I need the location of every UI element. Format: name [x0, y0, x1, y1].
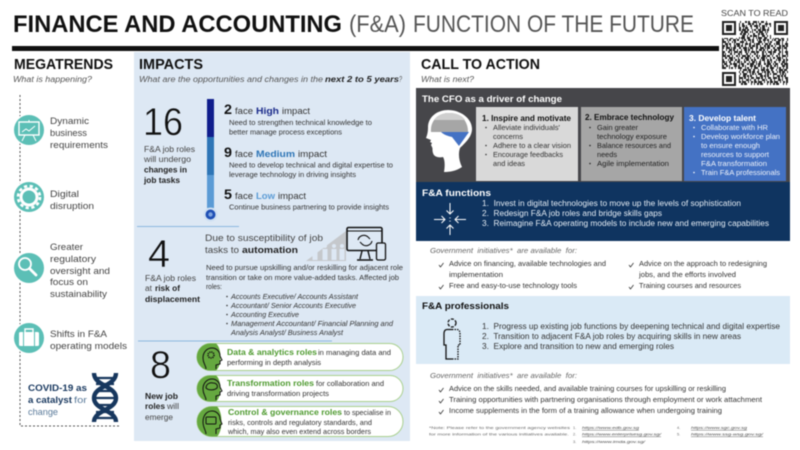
stat: 16 roles: job tasks: [143, 176, 181, 185]
government initiatives for professionals: Income supplements in the form of a training allowance when undergoing training: [449, 406, 722, 415]
panel: F&A functions: [416, 182, 790, 241]
card: develop talent: resources to support: [701, 150, 769, 159]
trend: operating models: Shifts in F&A: [50, 328, 108, 339]
card: inspire and motivate: Adhere to a clear vision: [493, 141, 571, 150]
card: embrace technology: needs: [597, 150, 617, 159]
panel: F&A professionals: 3. Explore and transition to new and emerging roles: [482, 341, 674, 351]
heading: impacts: next 2 to 5 years: [325, 74, 399, 84]
medium impact: face: [235, 149, 253, 160]
medium impact: Medium: [256, 149, 295, 160]
government initiatives for functions: Free and easy-to-use technology tools: [449, 281, 577, 290]
trend: regulatory oversight: sustainability: [50, 288, 107, 299]
heading: impacts: IMPACTS: [139, 56, 203, 73]
card: embrace technology: 2. Embrace technology: [585, 113, 675, 122]
role pill: control and governance: to specialise in: [344, 408, 391, 417]
government initiatives for functions: [430, 246, 767, 290]
trend: dynamic business requirements: [12, 114, 108, 150]
title: [13, 11, 694, 38]
stat: 8 new roles: [145, 344, 179, 422]
title: FINANCE AND ACCOUNTING: [13, 11, 342, 38]
role pill: control and governance: risks, controls and regulatory standards, and: [228, 418, 372, 427]
card: embrace technology: Balance resources and: [597, 141, 671, 150]
role pill: control and governance: which, may also even extend across borders: [227, 427, 371, 436]
panel: F&A functions: 1. Invest in digital technologies to move up the levels of sophistication: [482, 198, 741, 208]
automation heading: Due to susceptibility of job: [205, 232, 323, 243]
card: inspire and motivate: and ideas: [493, 159, 525, 168]
government initiatives for professionals: Training opportunities with partnering organisations through employment or work attachment: [449, 395, 762, 404]
card: develop talent: [684, 107, 786, 181]
heading: megatrends: MEGATRENDS: [14, 56, 113, 73]
card: develop talent: 3. Develop talent: [689, 114, 756, 123]
trend: digital disruption: disruption: [50, 200, 94, 211]
panel: CFO driver of change: The CFO as a driver of change: [422, 94, 562, 105]
role pill: transformation: driving transformation projects: [227, 389, 329, 398]
trend: regulatory oversight: focus on: [50, 276, 88, 287]
stat: 16 roles: [143, 101, 195, 185]
role pill: data and analytics: [197, 344, 403, 371]
card: inspire and motivate: Encourage feedbacks: [493, 150, 563, 159]
card: inspire and motivate: concerns: [493, 132, 523, 141]
trend: operating models: [12, 322, 127, 354]
panel: CFO driver of change: [416, 88, 790, 182]
panel: F&A professionals: 1. Progress up existing job functions by deepening technical and digital expertise: [482, 321, 780, 331]
medium impact: leverage technology in driving insights: [229, 170, 356, 179]
government initiatives for functions: Government initiatives* are available for:: [430, 246, 577, 255]
stat: 8 new roles: will: [166, 402, 179, 411]
footnote and links: 2.: [573, 432, 576, 436]
automation heading: automation: [242, 244, 298, 255]
stat: 16 roles: 16: [143, 101, 183, 144]
panel: impacts: [134, 52, 410, 441]
automation description: Accounting Executive: [230, 310, 299, 319]
heading: megatrends: What is happening?: [13, 74, 92, 84]
government initiatives for functions: implementation: [449, 270, 503, 279]
trend: regulatory oversight: Greater: [50, 241, 83, 252]
role pill: data and analytics: in managing data and: [318, 348, 391, 357]
footnote and links: 4.: [677, 426, 680, 430]
panel: F&A functions: F&A functions: [422, 188, 491, 199]
medium impact: Need to develop technical and digital expertise to: [229, 160, 393, 170]
automation heading: tasks to: [205, 244, 239, 255]
high impact: impact: [282, 106, 310, 117]
trend: digital disruption: [12, 180, 94, 214]
low impact: Continue business partnering to provide insights: [229, 202, 389, 212]
title: (F&A): [349, 11, 406, 38]
stat: 4 roles: F&A job roles: [145, 274, 196, 283]
automation description: Management Accountant/ Financial Planning and: [231, 319, 394, 328]
heading: megatrends: [13, 56, 113, 84]
panel: F&A professionals: [416, 296, 790, 364]
automation description: roles:: [206, 282, 222, 291]
trend: regulatory oversight: oversight and: [50, 265, 110, 276]
footnote and links: for more information of the various initiatives available.: [429, 432, 569, 436]
footnote and links: 5.: [677, 432, 680, 436]
stat: 16 roles: changes in: [144, 166, 187, 174]
footnote and links: 1.: [573, 426, 576, 430]
card: develop talent: Develop workforce plan: [701, 132, 780, 141]
card: embrace technology: Gain greater: [597, 123, 639, 132]
footnote and links: https://www.imda.gov.sg/: [582, 440, 646, 444]
callout: COVID-19 catalyst: COVID-19 as: [28, 382, 87, 393]
card: inspire and motivate: Alleviate individuals': [493, 123, 561, 132]
role pill: transformation: Transformation roles: [227, 379, 315, 388]
automation description: Accounts Executive/ Accounts Assistant: [230, 292, 359, 301]
card: develop talent: F&A transformation: [701, 159, 767, 168]
stat: 4 roles: displacement: [145, 295, 200, 304]
high impact: face: [235, 106, 253, 117]
stat: 16 roles: will undergo: [143, 155, 192, 164]
card: develop talent: Train F&A professionals: [701, 168, 780, 177]
stat: 4 roles: risk of: [155, 284, 180, 293]
automation description: transition or take on more value-added tasks. Affected job: [206, 273, 399, 282]
heading: call to action: What is next?: [421, 74, 474, 84]
government initiatives for functions: Training courses and resources: [639, 281, 741, 290]
panel: F&A functions: 2. Redesign F&A job roles and bridge skills gaps: [482, 208, 662, 218]
timeline dashed line: [20, 95, 121, 426]
panel: F&A professionals: F&A professionals: [422, 301, 509, 312]
government initiatives for professionals: [430, 371, 762, 415]
role pill: control and governance: Control & governance roles: [228, 408, 343, 417]
title rule: [12, 46, 719, 51]
card: embrace technology: Agile implementation: [597, 159, 669, 168]
trend: dynamic business requirements: business: [50, 127, 87, 138]
government initiatives for professionals: Government initiatives* are available for:: [430, 371, 577, 380]
trend: regulatory oversight: regulatory: [50, 253, 96, 264]
trend: operating models: operating models: [50, 340, 127, 351]
role pill: control and governance: [197, 406, 403, 436]
card: develop talent: to ensure enough: [701, 141, 760, 150]
low impact: 5: [224, 186, 232, 202]
medium impact: 9: [224, 144, 232, 160]
card: embrace technology: technology exposure: [597, 132, 667, 141]
heading: call to action: CALL TO ACTION: [421, 56, 540, 73]
card: inspire and motivate: 1. Inspire and motivate: [482, 114, 572, 123]
stat: 4 roles: [145, 233, 200, 304]
stat: 8 new roles: roles: [145, 402, 166, 411]
panel: call to action: [416, 56, 790, 444]
high impact: Need to strengthen technical knowledge to: [229, 118, 372, 127]
high impact: [224, 101, 372, 136]
trend: regulatory oversight: [12, 241, 110, 299]
heading: impacts: [139, 56, 402, 84]
high impact: High: [256, 106, 279, 117]
QR code block: SCAN TO READ: [721, 8, 788, 18]
callout: COVID-19 catalyst: for: [74, 394, 87, 405]
icon: person outline: [444, 319, 460, 359]
low impact: Low: [256, 191, 276, 202]
icon: automation monitor: [306, 228, 386, 261]
panel: F&A professionals: 2. Transition to adjacent F&A job roles by acquiring skills in new areas: [482, 331, 741, 341]
footnote and links: https://www.sgc.gov.sg: [691, 426, 748, 430]
card: embrace technology: [581, 107, 682, 181]
footnote and links: https://www.enterprisesg.gov.sg/: [582, 432, 662, 436]
low impact: [224, 186, 389, 212]
automation description: [206, 263, 403, 337]
stat: 8 new roles: emerge: [145, 413, 174, 422]
stat: 8 new roles: 8: [150, 344, 171, 387]
stat: 4 roles: 4: [148, 233, 170, 276]
high impact: better manage process exceptions: [229, 128, 342, 136]
role pill: transformation: [197, 376, 403, 402]
government initiatives for professionals: Advice on the skills needed, and available training courses for upskilling or reskilling: [449, 384, 726, 393]
role pill: transformation: for collaboration and: [316, 379, 384, 388]
heading: impacts: ?: [399, 74, 402, 84]
stat: 4 roles: at: [145, 284, 153, 293]
role pill: data and analytics: performing in depth analysis: [227, 358, 321, 367]
panel: megatrends: [12, 56, 127, 426]
automation description: Analysis Analyst/ Business Analyst: [230, 328, 344, 337]
automation description: Accountant/ Senior Accounts Executive: [230, 301, 356, 310]
footnote and links: https://www.ssg-wsg.gov.sg/: [691, 432, 764, 436]
government initiatives for functions: jobs, and the efforts involved: [638, 270, 736, 279]
card: develop talent: Collaborate with HR: [701, 123, 768, 132]
government initiatives for functions: Advice on financing, available technologies and: [449, 259, 606, 268]
automation heading: [205, 232, 323, 255]
title: FUNCTION OF THE FUTURE: [413, 11, 694, 38]
panel: F&A functions: 3. Reimagine F&A operating models to include new and emerging capabilities: [482, 218, 769, 228]
high impact: 2: [224, 101, 232, 117]
QR code block: [721, 8, 789, 87]
medium impact: [224, 144, 393, 179]
icon: head with brain: [426, 110, 472, 172]
footnote and links: *Note: Please refer to the government agency websites: [429, 426, 570, 430]
footnote and links: https://www.edb.gov.sg: [582, 426, 640, 430]
stat: 16 roles: F&A job roles: [144, 145, 195, 154]
medium impact: impact: [298, 149, 327, 160]
footnote and links: 3.: [573, 440, 576, 444]
stat: 8 new roles: New job: [145, 392, 178, 401]
role pill: data and analytics: Data & analytics roles: [227, 348, 318, 357]
heading: impacts: What are the opportunities and changes in the: [139, 74, 323, 84]
card: inspire and motivate: [476, 107, 578, 181]
low impact: face: [235, 191, 253, 202]
callout: COVID-19 catalyst: change: [28, 406, 58, 417]
icon: DNA helix: [94, 373, 116, 422]
trend: dynamic business requirements: Dynamic: [50, 115, 89, 126]
footnote and links: [429, 426, 764, 444]
automation description: Need to pursue upskilling and/or reskilling for adjacent role: [206, 263, 403, 272]
government initiatives for functions: Advice on the approach to redesigning: [639, 259, 767, 268]
thermometer scale: [204, 99, 218, 222]
trend: dynamic business requirements: requirements: [50, 139, 108, 150]
icon: converging arrows: [434, 203, 466, 235]
heading: call to action: [421, 56, 540, 84]
callout: COVID-19 catalyst: a catalyst: [28, 394, 72, 405]
low impact: impact: [278, 191, 306, 202]
callout: COVID-19 catalyst: [28, 373, 116, 422]
trend: digital disruption: Digital: [50, 188, 79, 199]
